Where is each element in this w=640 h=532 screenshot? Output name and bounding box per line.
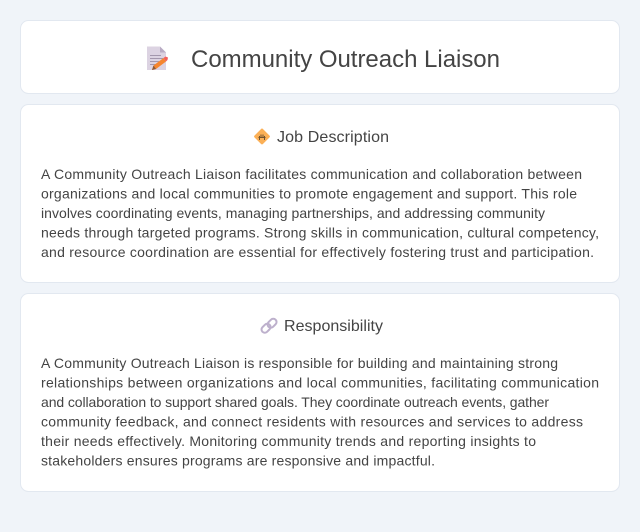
text block: responsibility [41, 355, 599, 468]
text block: responsibility: and collaboration to support shared goals. They coordinate outreach events, gather [41, 394, 549, 410]
icon: document with pencil [147, 46, 168, 70]
panel: job description [20, 104, 620, 282]
heading: job description: Job Description [277, 129, 389, 146]
text block: responsibility: A Community Outreach Liaison is responsible for building and maintaining strong [41, 355, 558, 371]
text block: job description [41, 166, 599, 260]
text block: responsibility: stakeholders ensures programs are responsive and impactful. [41, 452, 435, 468]
panel: title card [20, 20, 620, 94]
title: Community Outreach Liaison [191, 46, 500, 73]
text block: job description: A Community Outreach Liaison facilitates communication and collaboration between [41, 166, 582, 182]
text block: responsibility: relationships between organizations and local communities, facilitating communication [41, 374, 599, 390]
text block: job description: organizations and local communities to promote engagement and support. This role [41, 186, 577, 202]
text block: job description: and resource coordination are essential for effectively fostering trust and participation. [41, 244, 594, 260]
text block: responsibility: community feedback, and connect residents with resources and services to address [41, 414, 583, 430]
heading: responsibility: Responsibility [284, 318, 383, 335]
text block: job description: needs through targeted programs. Strong skills in communication, cultural competency, [41, 224, 599, 240]
text block: responsibility: their needs effectively. Monitoring community trends and reporting insights to [41, 433, 536, 449]
icon: chain link [260, 317, 278, 334]
icon: construction diamond sign [254, 128, 270, 145]
text block: job description: involves coordinating events, managing partnerships, and addressing community [41, 205, 545, 221]
panel: responsibility [20, 294, 620, 492]
